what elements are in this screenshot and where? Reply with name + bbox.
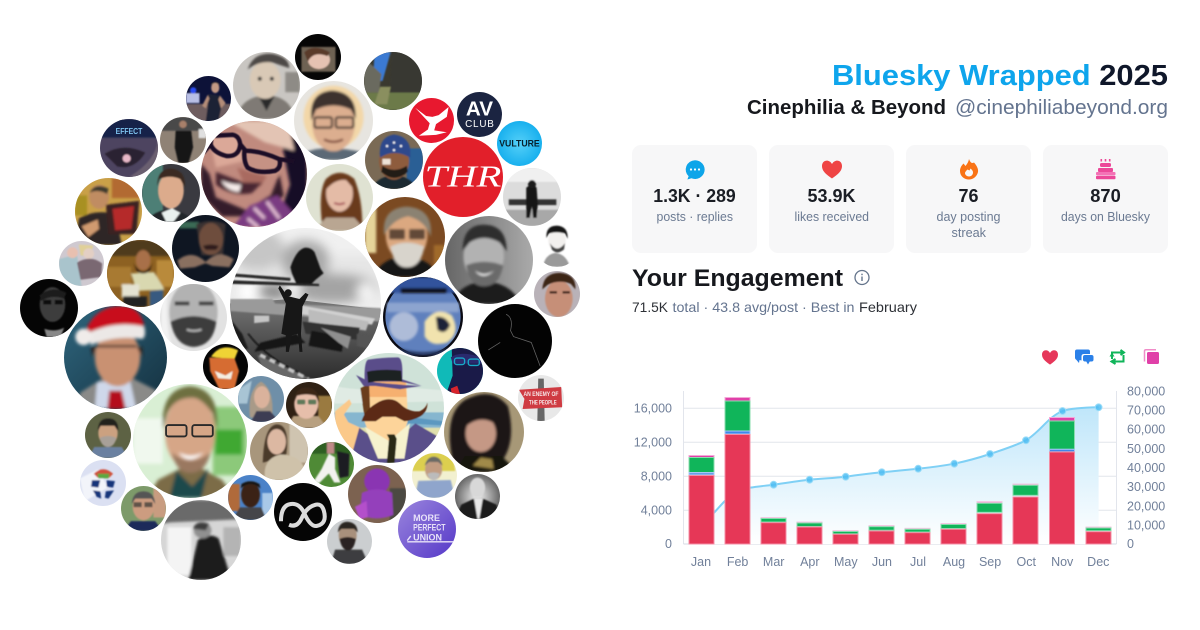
legend icons <box>1042 350 1159 365</box>
avatar: THR logo <box>423 137 503 217</box>
avatar: An Enemy of the People poster <box>518 375 564 421</box>
avatar: man with glasses outdoors <box>121 486 166 531</box>
month labels: Nov <box>1051 555 1074 569</box>
avatar: More Perfect Union logo: MORE <box>413 513 440 523</box>
right axis labels: 0 <box>1127 537 1134 551</box>
avatar: purple creature <box>348 465 406 523</box>
icon: likes legend <box>1042 350 1058 365</box>
bar: Mar <box>761 518 786 544</box>
bar: Aug <box>941 524 966 544</box>
avatar: THR logo: THR <box>425 160 502 194</box>
cumulative area <box>702 407 1099 544</box>
right axis labels: 10,000 <box>1127 518 1165 532</box>
avatar: figure on a bench <box>503 168 561 226</box>
avatar: Vulture logo: VULTURE <box>499 139 540 149</box>
avatar: AV Club logo: CLUB <box>465 119 494 130</box>
month labels: Jun <box>872 555 892 569</box>
avatar: man in black on street <box>160 117 206 163</box>
avatar: older man with grey hair and glasses <box>365 197 445 277</box>
right axis labels: 50,000 <box>1127 442 1165 456</box>
month labels: Mar <box>763 555 784 569</box>
avatar: man in subway, black and white <box>161 500 241 580</box>
stat label: days on Bluesky <box>1061 210 1151 224</box>
avatar: boy with cap <box>233 52 300 119</box>
month labels: Jan <box>691 555 711 569</box>
avatar: eagle logo <box>409 98 454 143</box>
summary line: February <box>859 299 917 315</box>
left axis labels <box>634 402 672 551</box>
avatar: AV Club logo: AV <box>466 97 493 120</box>
right axis labels <box>1127 384 1165 551</box>
bar: Nov <box>1050 418 1074 544</box>
avatar: man at typewriter in study <box>107 240 174 307</box>
avatar: man in suit <box>142 164 200 222</box>
avatar: smiling man with short beard <box>85 412 131 458</box>
stat value: 53.9K <box>808 186 856 206</box>
display name: Cinephilia & Beyond <box>747 97 946 119</box>
avatar: cartoon inspector with moustache <box>334 353 444 463</box>
avatar cluster <box>20 34 580 580</box>
avatar: AV Club logo <box>457 92 502 137</box>
bar: May <box>833 530 858 544</box>
avatar: white dog on grass <box>309 442 354 487</box>
bar: Oct <box>1013 484 1038 544</box>
stat label second line: streak <box>952 226 987 240</box>
avatar: bearded man in jacket <box>327 519 372 564</box>
avatar: black silhouette <box>478 304 552 378</box>
avatar: man at night with police lights <box>186 76 231 121</box>
right axis labels: 20,000 <box>1127 499 1165 513</box>
summary line <box>632 299 917 315</box>
grid lines <box>684 391 1116 544</box>
avatar: central black and white war film still <box>230 228 381 379</box>
left axis labels: 8,000 <box>641 470 672 484</box>
avatar: More Perfect Union logo: UNION <box>413 533 442 543</box>
month labels: May <box>834 555 858 569</box>
month labels: Oct <box>1016 555 1036 569</box>
right axis labels: 80,000 <box>1127 384 1165 398</box>
avatar: More Perfect Union logo: PERFECT <box>413 523 446 533</box>
stat label: likes received <box>794 210 869 224</box>
avatar: woman with dog <box>250 422 308 480</box>
avatar: rocky canyon <box>364 52 422 110</box>
cumulative line <box>702 407 1099 524</box>
avatar: Youth Effect film poster: EFFECT <box>116 126 143 136</box>
bar: Jul <box>905 528 930 544</box>
avatar: More Perfect Union logo <box>398 500 456 558</box>
heading: Your Engagement: Your Engagement <box>632 265 843 292</box>
bar: Feb <box>725 398 750 544</box>
avatar: Santa hat man <box>64 306 167 409</box>
month labels: Dec <box>1087 555 1109 569</box>
avatar: man in plaid shirt <box>412 453 457 498</box>
right axis labels: 30,000 <box>1127 480 1165 494</box>
avatar: man in hoodie against building <box>228 475 273 520</box>
icon: flame <box>960 159 978 180</box>
month labels <box>691 555 1109 569</box>
avatar: dark monochrome face <box>20 279 78 337</box>
avatar: bearded man in black and white <box>160 284 227 351</box>
title: Bluesky Wrapped 2025 <box>832 60 1168 92</box>
month labels: Feb <box>727 555 748 569</box>
avatar: man holding a book <box>75 178 142 245</box>
avatar: sci-fi space station with creature <box>383 277 463 357</box>
avatar: grey portrait of smiling man <box>445 216 533 304</box>
avatar: blond fighter cartoon <box>203 344 248 389</box>
avatar: woman with dark hair <box>444 392 524 472</box>
panel: days on Bluesky <box>1043 145 1168 253</box>
icon: heart <box>822 161 842 178</box>
left axis labels: 12,000 <box>634 436 672 450</box>
stat value: 870 <box>1090 186 1121 206</box>
month labels: Jul <box>910 555 926 569</box>
avatar: painting of a lady <box>59 241 104 286</box>
avatar: young man portrait <box>534 271 580 317</box>
left axis labels: 4,000 <box>641 504 672 518</box>
icon: birthday cake <box>1096 159 1116 179</box>
avatar: sketch portrait <box>543 224 570 267</box>
icon: quotes legend <box>1144 350 1159 364</box>
icon: info <box>855 270 869 284</box>
right axis labels: 40,000 <box>1127 461 1165 475</box>
right axis labels: 70,000 <box>1127 404 1165 418</box>
panel: likes received <box>769 145 894 253</box>
avatar: man with reflective sunglasses <box>286 382 332 428</box>
right axis labels: 60,000 <box>1127 422 1165 436</box>
summary line: 71.5K <box>632 299 669 315</box>
icon: chat bubble <box>686 160 705 180</box>
month labels: Sep <box>979 555 1001 569</box>
avatar: Youth Effect film poster <box>100 119 158 177</box>
avatar: bald man in suit, black and white <box>455 474 500 519</box>
summary line: total · 43.8 avg/post · Best in <box>672 299 854 315</box>
avatar: black framed portrait <box>295 34 341 80</box>
bar: Apr <box>797 522 822 544</box>
icon: reposts legend <box>1110 350 1124 364</box>
stat value: 1.3K · 289 <box>653 186 736 206</box>
avatar: rainbow guild logo <box>80 460 126 506</box>
avatar: close-up smiling man with glasses <box>201 121 307 227</box>
bar: Jan <box>689 456 714 544</box>
avatar: man in dark car <box>172 215 239 282</box>
avatar: infinity logo <box>274 483 332 541</box>
stacked bars <box>689 398 1111 544</box>
left axis labels: 0 <box>665 537 672 551</box>
chart: monthly engagement <box>634 384 1165 569</box>
avatar: watercolour man with glasses <box>294 81 373 160</box>
stat value: 76 <box>958 186 978 206</box>
avatar: Vulture logo <box>497 121 542 166</box>
avatar: woman with grey hair <box>238 376 284 422</box>
left axis labels: 16,000 <box>634 402 672 416</box>
line data points <box>770 404 1102 488</box>
bar: Sep <box>977 502 1002 544</box>
stat label: day posting <box>936 210 1001 224</box>
avatar: woman with long hair <box>306 164 373 231</box>
panel: day posting streak <box>906 145 1031 253</box>
month labels: Apr <box>800 555 820 569</box>
avatar: Darth Vader illustration <box>437 348 483 394</box>
bar: Dec <box>1086 527 1111 544</box>
avatar: man with bandana <box>365 131 423 189</box>
avatar: smiling man on green background <box>133 384 247 498</box>
month labels: Aug <box>943 555 965 569</box>
stat label: posts · replies <box>656 210 733 224</box>
icon: replies legend <box>1075 350 1094 364</box>
bar: Jun <box>869 526 894 544</box>
handle: @cinephiliabeyond.org <box>955 97 1168 119</box>
panel: posts and replies <box>632 145 757 253</box>
